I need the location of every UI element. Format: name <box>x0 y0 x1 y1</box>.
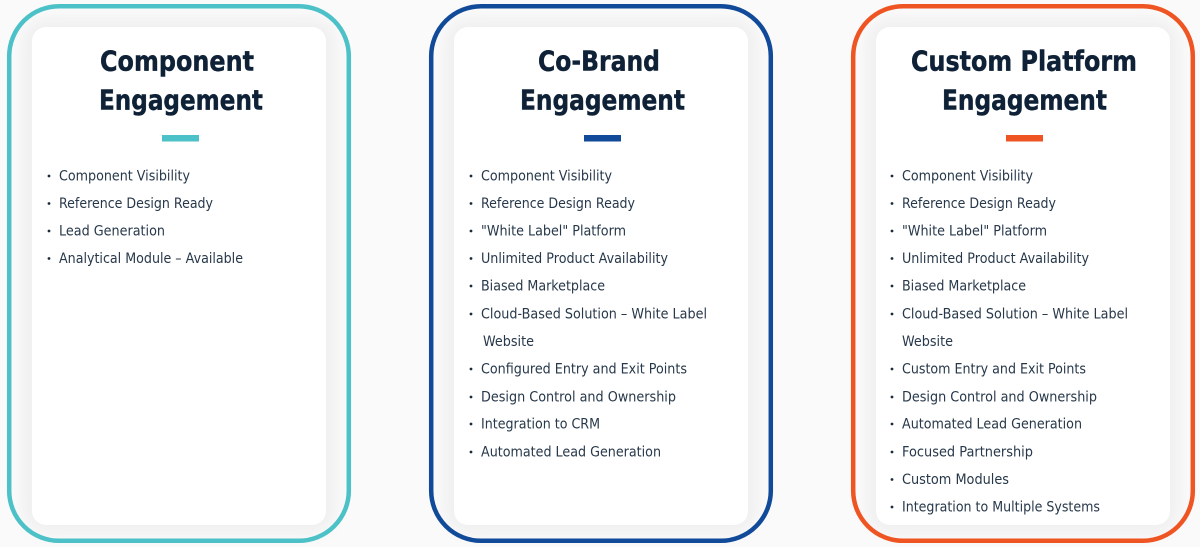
feature list: Custom Modules <box>902 472 1009 488</box>
heading: Engagement <box>942 84 1107 116</box>
feature list: Design Control and Ownership <box>481 390 676 406</box>
feature list: Integration to Multiple Systems <box>902 500 1100 516</box>
feature list: Reference Design Ready <box>59 196 213 212</box>
feature list <box>48 169 243 267</box>
white card <box>454 27 748 525</box>
feature list: Design Control and Ownership <box>902 390 1097 406</box>
feature list: Unlimited Product Availability <box>902 251 1089 267</box>
feature list: Cloud-Based Solution – White Label <box>902 307 1128 323</box>
feature list: Reference Design Ready <box>902 196 1056 212</box>
white card <box>876 27 1170 525</box>
feature list: Website <box>483 334 534 350</box>
heading <box>911 46 1137 116</box>
accent bar <box>584 135 621 142</box>
feature list: Configured Entry and Exit Points <box>481 362 687 378</box>
panel border: teal <box>9 6 349 541</box>
feature list: Biased Marketplace <box>481 279 605 295</box>
feature list: Lead Generation <box>59 224 165 240</box>
feature list: Automated Lead Generation <box>481 445 661 461</box>
panel border: blue <box>431 6 771 541</box>
panel: co-brand engagement <box>431 6 771 541</box>
feature list: Website <box>902 334 953 350</box>
heading: Co-Brand <box>538 46 660 78</box>
heading: Custom Platform <box>911 46 1137 78</box>
accent bar <box>162 135 199 142</box>
feature list: Component Visibility <box>902 169 1033 185</box>
panel: component engagement <box>9 6 349 541</box>
accent bar <box>1006 135 1043 142</box>
feature list: Custom Entry and Exit Points <box>902 362 1086 378</box>
feature list: Integration to CRM <box>481 417 600 433</box>
heading <box>520 46 685 116</box>
panel: custom platform engagement <box>853 6 1193 541</box>
feature list: Component Visibility <box>59 169 190 185</box>
feature list <box>891 169 1128 516</box>
panel border: orange <box>853 6 1193 541</box>
heading <box>99 46 263 116</box>
feature list: Biased Marketplace <box>902 279 1026 295</box>
heading: Component <box>100 46 254 78</box>
feature list: "White Label" Platform <box>902 224 1047 240</box>
feature list: Reference Design Ready <box>481 196 635 212</box>
feature list: Unlimited Product Availability <box>481 251 668 267</box>
feature list: Focused Partnership <box>902 445 1033 461</box>
feature list: Cloud-Based Solution – White Label <box>481 307 707 323</box>
feature list: Component Visibility <box>481 169 612 185</box>
white card <box>32 27 326 525</box>
feature list: Analytical Module – Available <box>59 251 243 267</box>
feature list: Automated Lead Generation <box>902 417 1082 433</box>
heading: Engagement <box>99 84 263 116</box>
feature list: "White Label" Platform <box>481 224 626 240</box>
feature list <box>470 169 707 461</box>
heading: Engagement <box>520 84 685 116</box>
